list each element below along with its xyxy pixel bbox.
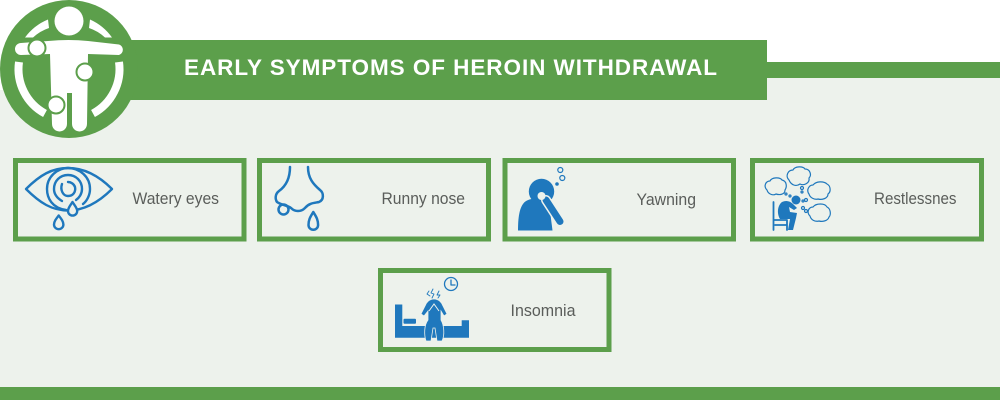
icon: body badge	[0, 0, 138, 138]
card: restlessness	[752, 160, 982, 239]
label: Runny nose	[382, 190, 465, 208]
card: watery eyes	[16, 160, 244, 239]
label: Restlessnes	[874, 190, 956, 208]
card: insomnia	[380, 270, 609, 350]
icon: worried person with thought clouds	[765, 167, 830, 230]
label: Watery eyes	[132, 190, 219, 208]
label: Yawning	[636, 191, 696, 209]
icon: nose	[276, 167, 323, 230]
icon: eye	[26, 168, 112, 229]
label: Insomnia	[510, 302, 576, 320]
right header stripe	[760, 62, 1000, 78]
icon: person on bed with clock	[395, 278, 469, 341]
card: runny nose	[260, 160, 488, 239]
title: EARLY SYMPTOMS OF HEROIN WITHDRAWAL	[184, 55, 717, 80]
bottom bar	[0, 387, 1000, 400]
pale background panel	[0, 78, 1000, 387]
title banner	[120, 40, 767, 100]
icon: yawning person	[518, 168, 565, 230]
card: yawning	[505, 160, 734, 239]
